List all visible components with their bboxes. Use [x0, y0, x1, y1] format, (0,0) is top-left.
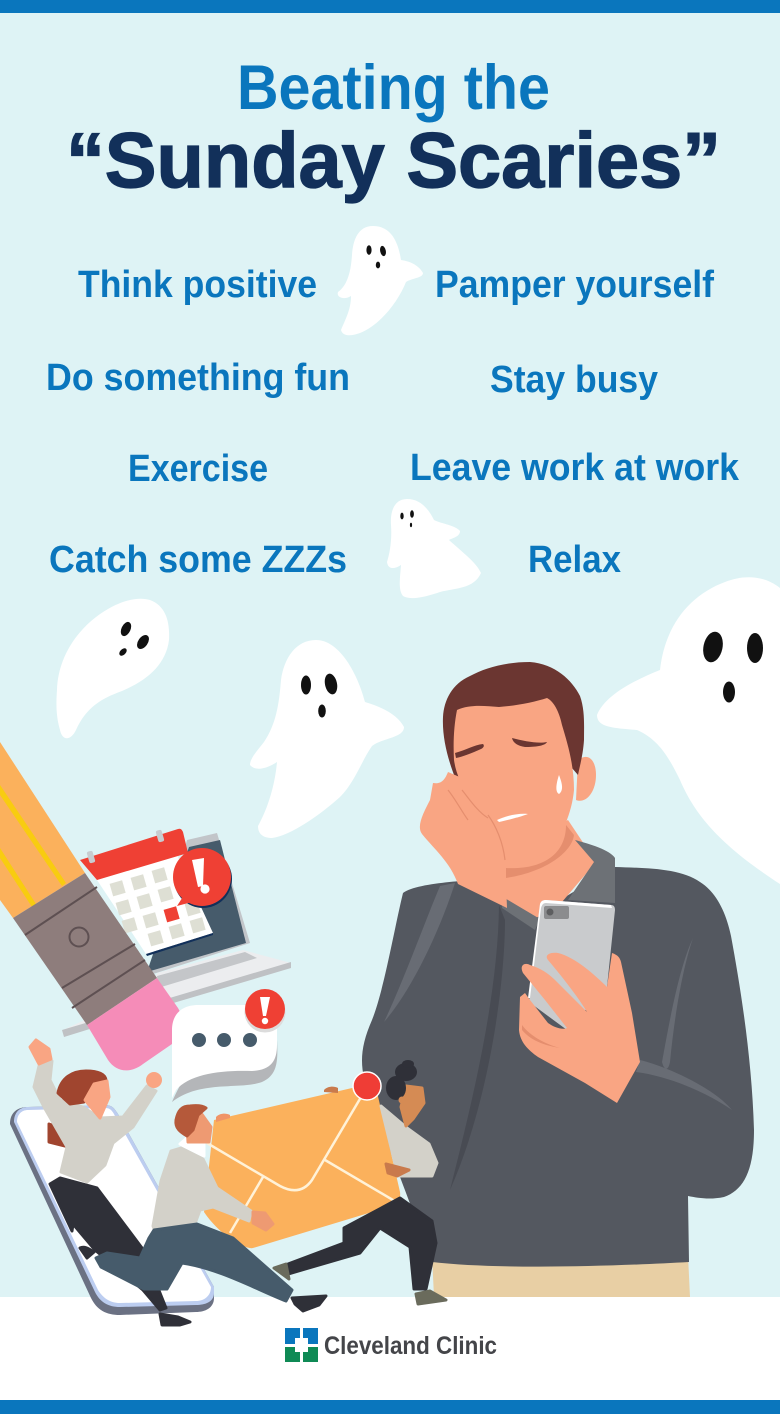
blouse: [34, 1061, 156, 1182]
tips list: Leave work at work: [410, 447, 740, 489]
tips list: Do something fun: [46, 357, 350, 399]
ghost: center: [250, 640, 404, 838]
speech bubble: [172, 989, 286, 1102]
tips list: Exercise: [128, 448, 268, 490]
ghost: top small: [338, 226, 423, 335]
shirt: [362, 867, 754, 1267]
ghost: right large: [597, 577, 780, 884]
tips list: [46, 264, 740, 581]
calendar and laptop with pencil: [0, 742, 291, 1070]
hands: [30, 1040, 51, 1064]
phone illustration: [10, 1105, 214, 1315]
laptop base: [63, 950, 291, 1030]
calendar day cells: [110, 867, 206, 946]
head: [58, 1071, 106, 1104]
sweater: [381, 1106, 437, 1176]
pencil ferrule: [13, 873, 157, 1025]
hand: [253, 1212, 273, 1230]
tips list: Catch some ZZZs: [49, 539, 347, 581]
man with phone: [362, 662, 754, 1297]
pencil eraser: [87, 978, 183, 1070]
calendar page: [97, 855, 213, 954]
hair: [443, 662, 584, 780]
neck: [503, 820, 596, 920]
title: “Sunday Scaries”: [66, 116, 721, 204]
ghost: middle small: [387, 499, 481, 598]
pencil body: [0, 742, 85, 918]
logo: Cleveland Clinic: [285, 1328, 497, 1362]
laptop screen: [150, 833, 250, 975]
mouth: [497, 814, 528, 822]
hand: [386, 1164, 409, 1176]
person: woman carrying envelope back: [274, 1060, 446, 1304]
sweater: [153, 1148, 251, 1229]
tips list: Pamper yourself: [435, 264, 714, 306]
envelope: [204, 1072, 400, 1248]
tips list: Stay busy: [490, 359, 658, 401]
trousers: [96, 1224, 292, 1301]
head: [401, 1086, 424, 1126]
calendar header: [80, 829, 188, 880]
hand holding phone: [519, 953, 640, 1103]
hair back: [49, 1124, 65, 1146]
legs: [50, 1178, 166, 1310]
phone in hand: [529, 900, 615, 1030]
eyes: [455, 744, 484, 758]
ghost: left tilted: [56, 599, 169, 738]
tips list: Relax: [528, 539, 621, 581]
title: [66, 53, 721, 204]
shoes: [274, 1264, 289, 1279]
tips list: Think positive: [78, 264, 317, 306]
ear: [576, 757, 596, 801]
person: man carrying envelope front: [96, 1106, 326, 1311]
shoes: [292, 1296, 326, 1311]
trousers: [432, 1255, 690, 1297]
person: woman jumping from phone: [30, 1040, 190, 1325]
tear: [556, 775, 562, 794]
trousers: [288, 1198, 436, 1289]
logo: Cleveland Clinic: Cleveland Clinic: [324, 1332, 497, 1360]
curly hair: [395, 1063, 417, 1081]
face: [454, 698, 574, 861]
title: Beating the: [237, 53, 550, 123]
hand on cheek: [420, 772, 507, 908]
calendar alert: [174, 850, 232, 908]
head: [187, 1113, 211, 1142]
shirt shading: [384, 883, 455, 1022]
collar: [568, 840, 615, 903]
